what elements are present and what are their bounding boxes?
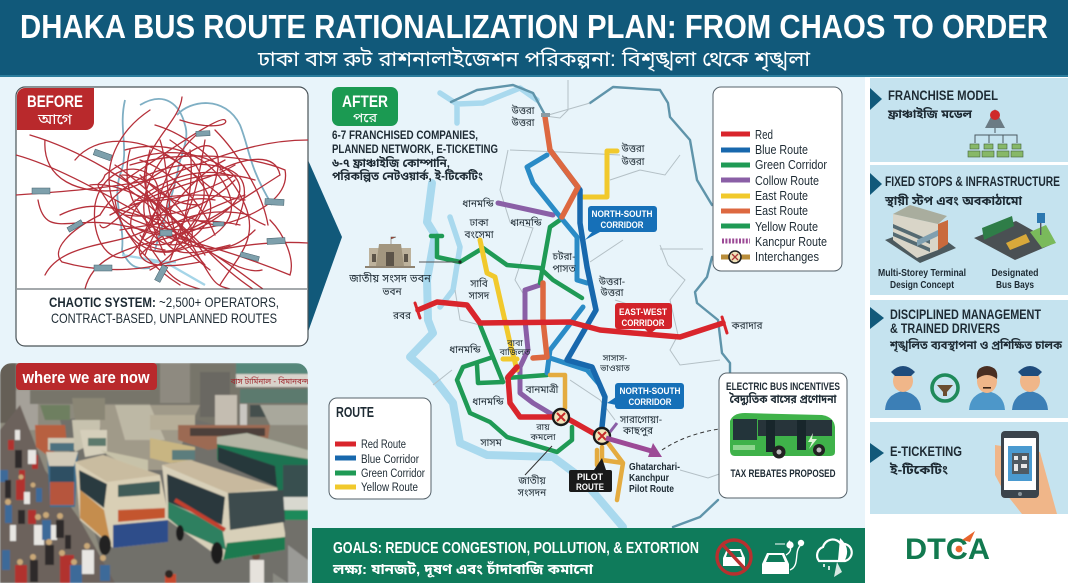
arrow: pilot route — [525, 423, 719, 475]
place labels: ভাওয়াত — [599, 363, 630, 373]
route: yellow — [480, 151, 617, 370]
text: after description: ৬-৭ ফ্রাঞ্চাইজি কোম্পানি, — [332, 157, 450, 170]
place labels: বাবা — [506, 338, 523, 348]
icon: officer right — [1012, 366, 1048, 410]
interchange markers — [553, 409, 610, 444]
legend: all routes: Interchanges — [755, 250, 819, 264]
panel: disciplined management — [870, 300, 1068, 418]
label: Ghatarchari-Kanchpur pilot route: Kanchpur — [629, 472, 669, 484]
district lines — [433, 80, 725, 478]
callout: pilot route: ROUTE — [576, 482, 604, 492]
place labels: উত্তরা — [621, 156, 645, 168]
panel: franchise model — [870, 78, 1068, 162]
caption: chaotic system: CONTRACT-BASED, UNPLANNED ROUTES — [51, 310, 277, 326]
goals bar: লক্ষ্য: যানজট, দূষণ এবং চাঁদাবাজি কমানো — [332, 560, 594, 577]
callout: north-south corridor upper: CORRIDOR — [600, 220, 644, 231]
big bus right — [162, 460, 285, 564]
icon: green electric bus — [730, 413, 835, 458]
panel: fixed stops and infrastructure: স্থায়ী স্টপ এবং অবকাঠামো — [884, 193, 1022, 208]
callout: pilot route: PILOT — [577, 472, 603, 482]
legend: route key: Red Route — [361, 439, 406, 451]
logo: DTCA: DTCA — [905, 533, 990, 566]
legend: all routes: East Route — [755, 189, 808, 203]
place labels: উত্তরা — [511, 117, 535, 129]
place labels: উত্তরা — [511, 105, 535, 117]
place labels: বংসেমা — [464, 230, 494, 241]
legend: all routes: Red — [755, 128, 773, 142]
shop sign: বাস টার্মিনাল - বিমানবন্দর — [230, 376, 314, 386]
callout: north-south corridor upper: NORTH-SOUTH — [592, 209, 653, 220]
callout: east-west corridor: EAST-WEST — [619, 307, 667, 318]
badge: before: আগে — [37, 111, 73, 127]
caption: chaotic system — [49, 294, 279, 326]
panel: electric bus incentives: TAX REBATES PROPOSED — [730, 468, 836, 480]
place labels: ধানমন্ডি — [449, 344, 481, 356]
panel: disciplined management: & TRAINED DRIVERS — [890, 321, 1000, 336]
panel: franchise model: ফ্রাঞ্চাইজি মডেল — [887, 106, 973, 121]
place labels: ধানমন্ডি — [462, 198, 494, 210]
panel: electric bus incentives: বৈদ্যুতিক বাসের প্রণোদনা — [729, 393, 837, 406]
route: dark blue — [550, 150, 605, 427]
badge: before — [17, 88, 94, 130]
legend: all routes: Blue Route — [755, 143, 808, 157]
place labels: সারাগোয়া- — [619, 415, 662, 426]
legend: route key: Green Corridor — [361, 468, 425, 480]
badge: after — [332, 87, 398, 126]
subtitle in Bengali: ঢাকা বাস রুট রাশনালাইজেশন পরিকল্পনা: বিশৃঙ্খলা থেকে শৃঙ্খলা — [257, 47, 810, 72]
place labels: ধানমন্ডি — [472, 396, 504, 408]
panel: before — [16, 87, 308, 346]
icon: org chart — [968, 109, 1023, 157]
legend: all routes: Yellow Route — [755, 220, 818, 234]
panel: e-ticketing — [870, 422, 1068, 514]
place labels: উত্তরা — [600, 287, 624, 299]
badge: where we are now — [16, 363, 157, 390]
label: Ghatarchari-Kanchpur pilot route — [629, 461, 680, 495]
callout: north-south corridor lower — [607, 383, 684, 409]
place labels: সাসম — [479, 438, 502, 449]
legend: all routes — [713, 87, 842, 271]
route: light blue — [527, 155, 600, 385]
panel: electric bus incentives: ELECTRIC BUS INCENTIVES — [726, 381, 840, 393]
panel: electric bus incentives — [719, 373, 847, 498]
panel: e-ticketing: ই-টিকেটিং — [889, 462, 948, 477]
chaotic route map — [16, 97, 308, 300]
left mid bus — [46, 452, 78, 507]
caption: chaotic system: CHAOTIC SYSTEM: ~2,500+ OPERATORS, — [49, 294, 279, 310]
label: Ghatarchari-Kanchpur pilot route: Pilot Route — [629, 483, 674, 495]
place labels: বানমাত্রী — [525, 384, 559, 396]
legend: all routes: East Route — [755, 204, 808, 218]
place labels: বাজিলত — [499, 346, 531, 357]
icon: emblem — [932, 375, 958, 401]
icon: driver — [969, 366, 1005, 410]
badge: where we are now: where we are now — [22, 368, 150, 387]
place labels: জাতীয় — [517, 475, 546, 487]
panel: fixed stops and infrastructure: Multi-Storey Terminal — [878, 268, 966, 279]
green bus — [217, 433, 308, 520]
legend: all routes: Kancpur Route — [755, 235, 827, 249]
place labels: রবর — [392, 311, 412, 322]
legend: route key — [329, 398, 431, 499]
place labels: পাসত — [552, 264, 576, 275]
callout: east-west corridor: CORRIDOR — [622, 318, 665, 329]
text: after description — [332, 128, 498, 183]
place labels: চটরা- — [552, 251, 575, 263]
place labels: ধানমন্ডি — [510, 217, 542, 229]
icon: no cars — [717, 540, 751, 574]
route: green — [431, 220, 582, 452]
arrow: before to after — [308, 160, 342, 332]
route: red — [415, 302, 727, 433]
place labels: সাসাস- — [602, 353, 627, 363]
place labels: কমলো — [530, 432, 556, 442]
legend: all routes: Green Corridor — [755, 158, 827, 172]
place labels: সাবি — [469, 278, 489, 290]
callout: north-south corridor lower: NORTH-SOUTH — [620, 386, 681, 397]
callout: pilot route — [569, 458, 612, 492]
legend: route key: Yellow Route — [361, 482, 418, 494]
badge: after: AFTER — [342, 92, 388, 111]
icon: designated bus bays — [974, 213, 1056, 260]
place labels: সংসদন — [517, 488, 547, 499]
legend: all routes: Collow Route — [755, 174, 819, 188]
badge: after: পরে — [353, 110, 377, 125]
rivers — [410, 88, 623, 527]
place labels: উত্তরা — [621, 143, 645, 155]
road — [60, 410, 308, 583]
panel: franchise model: FRANCHISE MODEL — [888, 88, 998, 103]
place labels: ভবন — [382, 287, 402, 298]
icon: multi-storey terminal — [885, 205, 956, 263]
icon: rain cloud — [817, 538, 852, 577]
crowd — [0, 405, 308, 583]
distant buses — [35, 398, 308, 472]
buildings — [0, 363, 308, 434]
place labels: সাসদ — [468, 291, 490, 302]
panel: fixed stops and infrastructure: Design Concept — [890, 280, 955, 291]
text: after description: 6-7 FRANCHISED COMPANIES, — [332, 128, 478, 142]
route: amber lower — [550, 375, 623, 500]
goals bar — [312, 528, 865, 583]
place labels — [348, 105, 763, 499]
callout: north-south corridor lower: CORRIDOR — [628, 397, 672, 408]
icon: parliament building — [365, 237, 462, 268]
legend: route key: Blue Corridor — [361, 454, 419, 466]
callout: north-south corridor upper — [585, 206, 657, 240]
city boundary — [451, 85, 730, 527]
panel: fixed stops and infrastructure: Designated — [992, 268, 1038, 279]
buses in the tangle — [32, 131, 285, 282]
place labels: জাতীয় সংসদ ভবন — [348, 272, 431, 285]
icon: car with exhaust — [762, 540, 804, 574]
text: after description: PLANNED NETWORK, E-TICKETING — [332, 142, 498, 156]
icon: officer left — [885, 366, 921, 410]
legend: route key: ROUTE — [336, 404, 374, 421]
route: orange — [533, 117, 578, 358]
place labels: রায় — [535, 422, 550, 432]
route: purple — [498, 203, 553, 415]
badge: before: BEFORE — [27, 92, 83, 111]
goals bar: GOALS: REDUCE CONGESTION, POLLUTION, & EXTORTION — [333, 540, 699, 557]
place labels: উত্তরা- — [598, 276, 625, 288]
callout: east-west corridor — [615, 303, 672, 334]
right column background — [865, 77, 1068, 583]
big bus left — [75, 455, 168, 555]
place labels: কাছপুর — [622, 426, 654, 437]
icon: phone with QR ticket — [995, 431, 1057, 514]
label: Ghatarchari-Kanchpur pilot route: Ghatarchari- — [629, 461, 680, 473]
panel: e-ticketing: E-TICKETING — [890, 443, 962, 459]
map: after network — [348, 80, 763, 527]
panel: fixed stops and infrastructure: Bus Bays — [996, 280, 1034, 291]
place labels: ঢাকা — [469, 218, 489, 229]
panel: street photo — [0, 363, 314, 583]
text: after description: পরিকল্পিত নেটওয়ার্ক, ই-টিকেটিং — [332, 169, 483, 183]
place labels: করাদার — [731, 321, 763, 332]
header banner — [0, 0, 1068, 77]
panel: fixed stops and infrastructure — [870, 165, 1068, 295]
